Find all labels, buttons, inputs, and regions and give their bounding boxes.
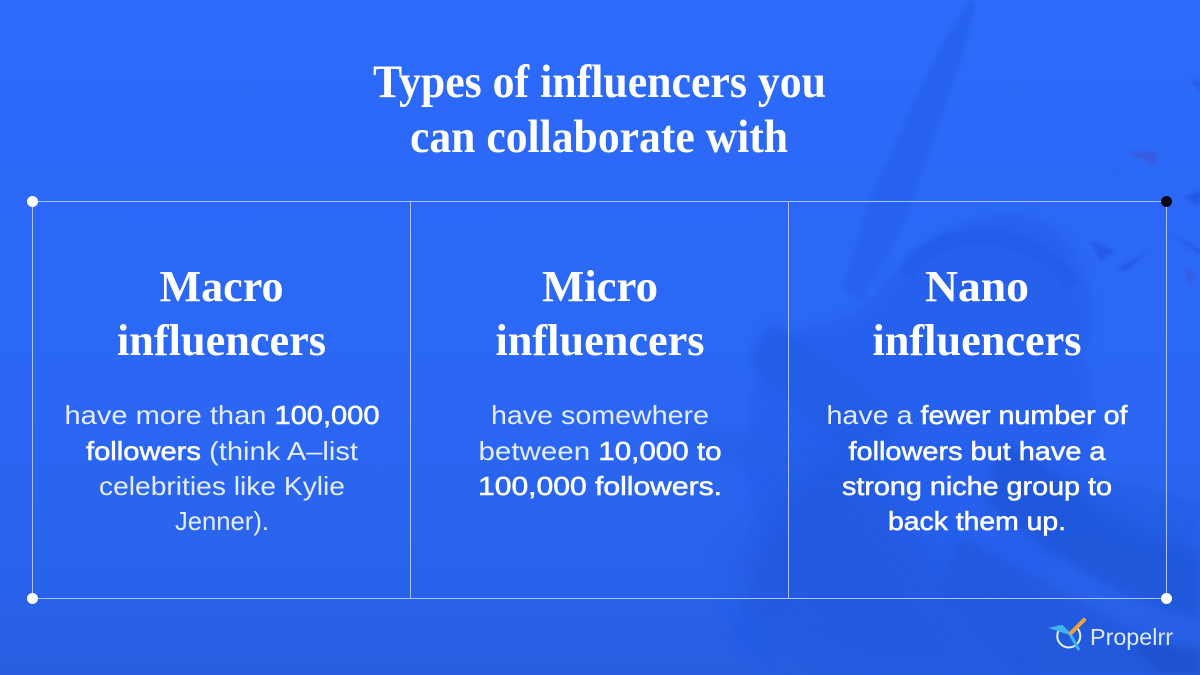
panel: micro influencers [478, 262, 722, 501]
heading: micro: influencers [496, 316, 704, 365]
panel: nano influencers [826, 262, 1128, 536]
title [373, 56, 826, 163]
text: macro description [64, 400, 380, 536]
body glow [740, 215, 1096, 600]
table frame with three columns [32, 202, 1166, 598]
title: Types of influencers you [373, 56, 826, 108]
text: nano description: followers but have a [848, 436, 1106, 466]
logo: Propelrr [1052, 620, 1173, 650]
heading: nano: influencers [872, 316, 1082, 365]
heading: macro: influencers [117, 316, 326, 365]
text: macro description: celebrities like Kylie [99, 471, 345, 501]
heading: nano: Nano [925, 262, 1029, 311]
icon: propeller [1052, 620, 1084, 650]
text: micro description: between 10,000 to [478, 436, 722, 466]
text: nano description: strong niche group to [842, 471, 1112, 501]
text: micro description [478, 400, 722, 501]
corner dot: bottom left [27, 593, 38, 604]
polygon fragments [1126, 152, 1157, 166]
text: micro description: have somewhere [491, 400, 709, 430]
title: can collaborate with [410, 111, 788, 163]
text: nano description: back them up. [888, 506, 1066, 536]
text: macro description: Jenner). [175, 506, 269, 536]
corner dot: bottom right [1161, 593, 1172, 604]
text: micro description: 100,000 followers. [478, 471, 722, 501]
heading: micro: Micro [542, 262, 658, 311]
dragonfly background illustration [680, 0, 1200, 675]
text: nano description: have a fewer number of [826, 400, 1128, 430]
heading: micro [496, 262, 704, 365]
text: macro description: followers (think A–list [86, 436, 359, 466]
lower sphere [740, 470, 1010, 675]
ring arc [905, 237, 1072, 285]
text: macro description: have more than 100,000 [64, 400, 380, 430]
darker lobes [750, 320, 900, 470]
upper wing [842, 0, 976, 300]
heading: nano [872, 262, 1082, 365]
corner dot: top right [1161, 196, 1172, 207]
corner dot: top left [27, 196, 38, 207]
wordmark: Propelrr [1090, 624, 1173, 650]
text: nano description [826, 400, 1128, 536]
heading: macro: Macro [160, 262, 284, 311]
heading: macro [117, 262, 326, 365]
panel: macro influencers [64, 262, 380, 536]
